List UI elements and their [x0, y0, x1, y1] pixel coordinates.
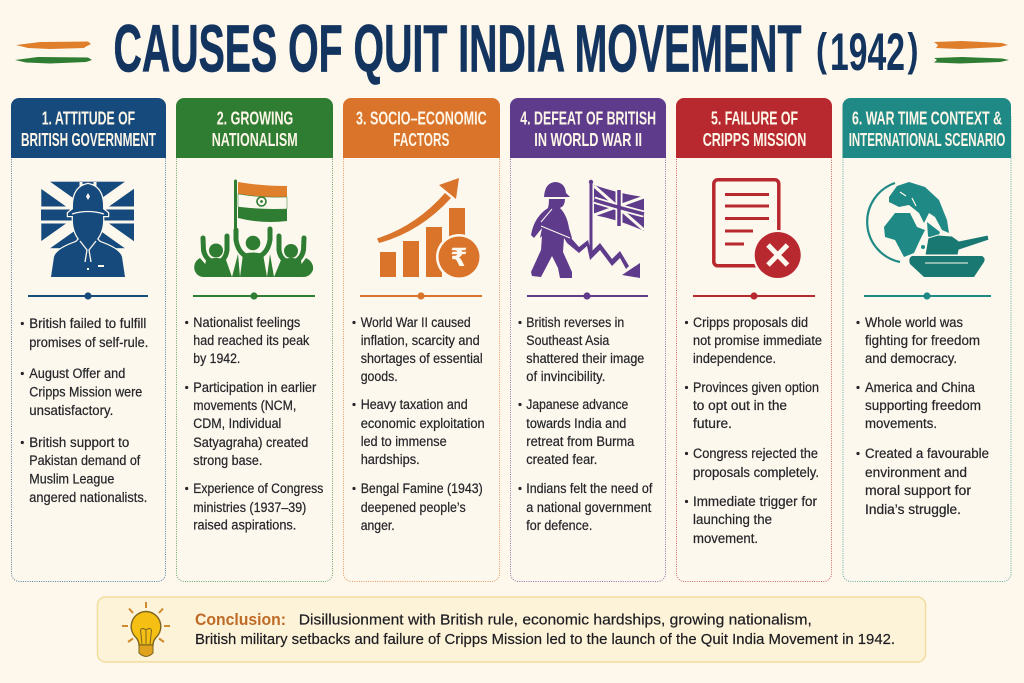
- text block: points: promises of self-rule.: [29, 335, 148, 350]
- header: failure of Cripps Mission: [676, 98, 832, 158]
- text block: points: created fear.: [526, 452, 597, 467]
- divider: [864, 292, 991, 300]
- text block: points: launching the: [693, 512, 772, 527]
- icon: Indian flag and cheering crowd: [194, 181, 313, 277]
- text block: points: India’s struggle.: [865, 502, 961, 517]
- text block: points: ministries (1937–39): [193, 500, 306, 515]
- text block: points: Cripps proposals did: [693, 315, 808, 330]
- icon: rising bar chart with rupee coin: ₹: [450, 243, 468, 272]
- header: attitude of British government: BRITISH GOVERNMENT: [21, 129, 156, 150]
- divider: [193, 292, 315, 300]
- panel: socio-economic factors: [343, 98, 500, 582]
- header: attitude of British government: [11, 98, 166, 158]
- header: defeat of British in World War II: IN WORLD WAR II: [534, 129, 642, 150]
- text: conclusion body: Disillusionment with British rule, economic hardships, growing nationalism,: [299, 612, 812, 628]
- text block: points: led to immense: [361, 434, 447, 449]
- divider: [360, 292, 482, 300]
- text block: points: Bengal Famine (1943): [361, 481, 483, 496]
- text block: points: British support to: [29, 435, 129, 450]
- text block: points: Cripps Mission were: [29, 384, 142, 400]
- icon: Union Jack and British officer: [41, 182, 134, 277]
- title: (: [816, 24, 827, 75]
- text block: points: [185, 315, 324, 532]
- text block: points: Participation in earlier: [193, 380, 317, 395]
- text block: points: Nationalist feelings: [193, 315, 301, 330]
- text block: points: Indians felt the need of: [526, 481, 653, 496]
- text block: points: shattered their image: [526, 351, 644, 366]
- text block: points: Congress rejected the: [693, 446, 818, 461]
- text block: points: Provinces given option: [693, 380, 819, 395]
- text block: points: America and China: [865, 380, 975, 395]
- text block: points: independence.: [693, 351, 776, 366]
- text block: points: British failed to fulfill: [29, 316, 146, 331]
- text block: points: and democracy.: [865, 351, 957, 366]
- text block: points: future.: [693, 416, 732, 431]
- text block: points: not promise immediate: [693, 333, 822, 348]
- text block: points: movements.: [865, 416, 937, 431]
- header: attitude of British government: 1. ATTITUDE OF: [42, 108, 135, 128]
- text block: points: for defence.: [526, 518, 592, 533]
- text: conclusion label: Conclusion:: [195, 611, 286, 629]
- text block: points: Pakistan demand of: [29, 453, 141, 468]
- text block: points: to opt out in the: [693, 398, 787, 413]
- panel: growing nationalism: [176, 98, 333, 582]
- header: war time context and international scenario: [842, 98, 1011, 158]
- text block: points: a national government: [526, 500, 652, 515]
- text block: points: raised aspirations.: [193, 518, 296, 532]
- text block: points: Whole world was: [865, 315, 963, 330]
- text block: points: [685, 315, 822, 546]
- icon: globe and tank: [867, 182, 989, 277]
- title: 1942: [830, 23, 905, 82]
- text block: points: towards India and: [526, 416, 626, 431]
- icon: right tricolour brush strokes: [934, 41, 1009, 64]
- text block: points: strong base.: [193, 453, 262, 468]
- text block: points: fighting for freedom: [865, 333, 980, 348]
- text block: points: Satyagraha) created: [193, 435, 308, 450]
- header: growing nationalism: [176, 98, 333, 158]
- header: growing nationalism: NATIONALISM: [212, 129, 298, 150]
- icon: retreating soldier, Union Jack and falling arrow: [531, 180, 644, 278]
- text block: points: Immediate trigger for: [693, 494, 818, 509]
- divider: [527, 292, 648, 300]
- text: conclusion body: [195, 612, 895, 648]
- icon: rising bar chart with rupee coin: [377, 178, 482, 280]
- panel: failure of Cripps Mission: [676, 98, 832, 582]
- text block: points: by 1942.: [193, 351, 240, 366]
- header: socio-economic factors: 3. SOCIO–ECONOMIC: [356, 108, 487, 128]
- text block: points: angered nationalists.: [29, 490, 147, 505]
- text block: points: Southeast Asia: [526, 333, 610, 348]
- text block: points: [518, 315, 653, 533]
- text block: points: Experience of Congress: [193, 481, 324, 496]
- header: failure of Cripps Mission: 5. FAILURE OF: [711, 108, 798, 128]
- text block: points: Heavy taxation and: [361, 397, 468, 412]
- panel: war time context and international scenario: [842, 98, 1011, 582]
- text block: points: unsatisfactory.: [29, 403, 113, 418]
- title: ): [908, 24, 918, 75]
- text block: points: moral support for: [865, 483, 972, 498]
- text: conclusion body: British military setbacks and failure of Cripps Mission led to the launch of the Quit India Movement in 1942.: [195, 631, 895, 648]
- panel: attitude of British government: [11, 98, 166, 582]
- text block: points: World War II caused: [361, 315, 471, 330]
- text block: points: anger.: [361, 518, 395, 533]
- text block: points: Japanese advance: [526, 397, 628, 412]
- text block: points: of invincibility.: [526, 369, 605, 384]
- text block: points: proposals completely.: [693, 465, 819, 480]
- text block: points: [856, 315, 989, 517]
- text block: points: [21, 316, 148, 505]
- text block: points: had reached its peak: [193, 333, 310, 348]
- text block: points: hardships.: [361, 452, 420, 467]
- text block: points: CDM, Individual: [193, 416, 281, 431]
- header: defeat of British in World War II: [510, 98, 666, 158]
- icon: light bulb: [122, 602, 170, 656]
- header: socio-economic factors: [343, 98, 500, 158]
- text block: points: deepened people’s: [361, 500, 466, 515]
- text block: points: goods.: [361, 369, 398, 384]
- text block: points: Muslim League: [29, 472, 114, 486]
- text block: points: shortages of essential: [361, 351, 483, 366]
- text block: points: [352, 315, 485, 533]
- header: socio-economic factors: FACTORS: [393, 129, 449, 150]
- text block: points: inflation, scarcity and: [361, 333, 480, 348]
- header: growing nationalism: 2. GROWING: [217, 108, 293, 128]
- icon: left tricolour brush strokes: [15, 42, 92, 64]
- header: defeat of British in World War II: 4. DEFEAT OF BRITISH: [520, 108, 656, 128]
- header: failure of Cripps Mission: CRIPPS MISSION: [703, 129, 806, 150]
- text block: points: movements (NCM,: [193, 398, 296, 413]
- text block: points: supporting freedom: [865, 398, 981, 413]
- text block: points: movement.: [693, 531, 758, 546]
- icon: rejected document: [714, 180, 803, 280]
- text block: points: British reverses in: [526, 315, 624, 330]
- text block: points: August Offer and: [29, 366, 125, 381]
- panel: defeat of British in World War II: [510, 98, 666, 582]
- text block: points: Created a favourable: [865, 446, 989, 461]
- divider: [693, 292, 815, 300]
- text block: points: retreat from Burma: [526, 434, 635, 449]
- callout: conclusion: [98, 597, 926, 662]
- divider: [28, 292, 148, 300]
- text block: points: environment and: [865, 465, 967, 480]
- text block: points: economic exploitation: [361, 416, 485, 431]
